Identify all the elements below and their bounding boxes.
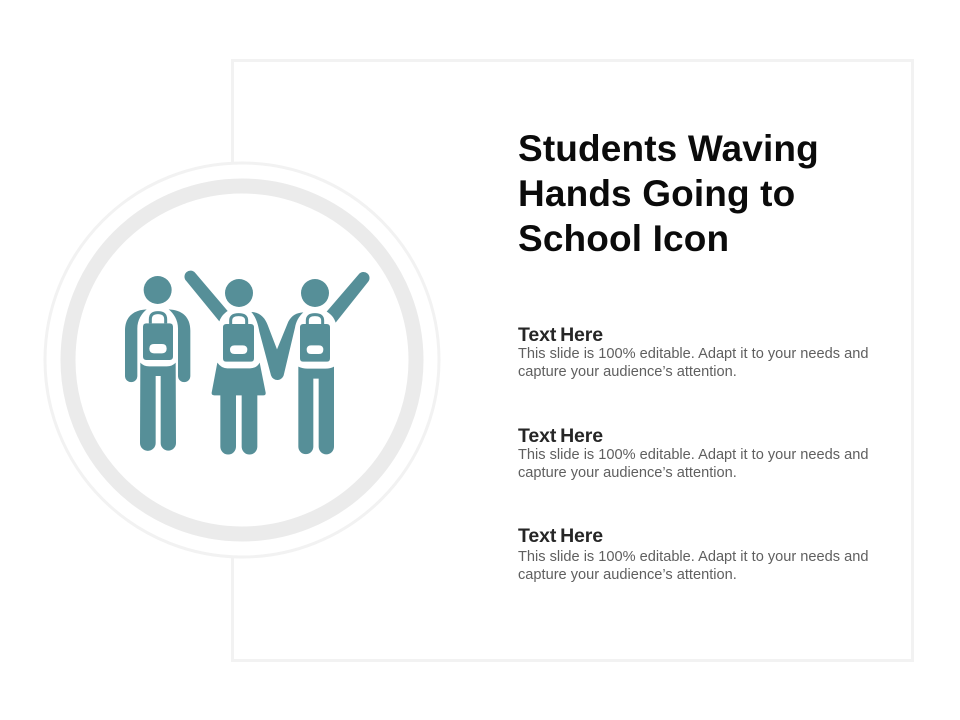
body 3: This slide is 100% editable. Adapt it to your needs and (518, 548, 868, 564)
text block 2 (518, 425, 868, 481)
text block 1 (518, 324, 868, 380)
outer thin ring (45, 163, 439, 557)
title: Hands Going to (518, 173, 795, 214)
body 1: This slide is 100% editable. Adapt it to your needs and (518, 346, 868, 362)
panel: outer frame (231, 59, 914, 662)
student 1 (125, 276, 190, 451)
thick inner ring (68, 186, 416, 534)
student 2 (184, 271, 266, 454)
icon: three students waving hands (125, 271, 370, 454)
body 2 (518, 446, 868, 481)
title (518, 128, 819, 259)
student arms holding hands (251, 312, 303, 380)
body 1: capture your audience’s attention. (518, 364, 737, 380)
heading 2: Text Here (518, 425, 603, 447)
body 3: capture your audience’s attention. (518, 567, 737, 583)
body 1 (518, 346, 868, 380)
title: Students Waving (518, 128, 819, 169)
body 2: This slide is 100% editable. Adapt it to your needs and (518, 446, 868, 462)
title: School Icon (518, 218, 729, 259)
text block 3 (518, 525, 868, 583)
heading 3: Text Here (518, 525, 603, 547)
body 2: capture your audience’s attention. (518, 465, 737, 481)
student 3 (298, 272, 370, 454)
body 3 (518, 548, 868, 583)
heading 1: Text Here (518, 324, 603, 346)
